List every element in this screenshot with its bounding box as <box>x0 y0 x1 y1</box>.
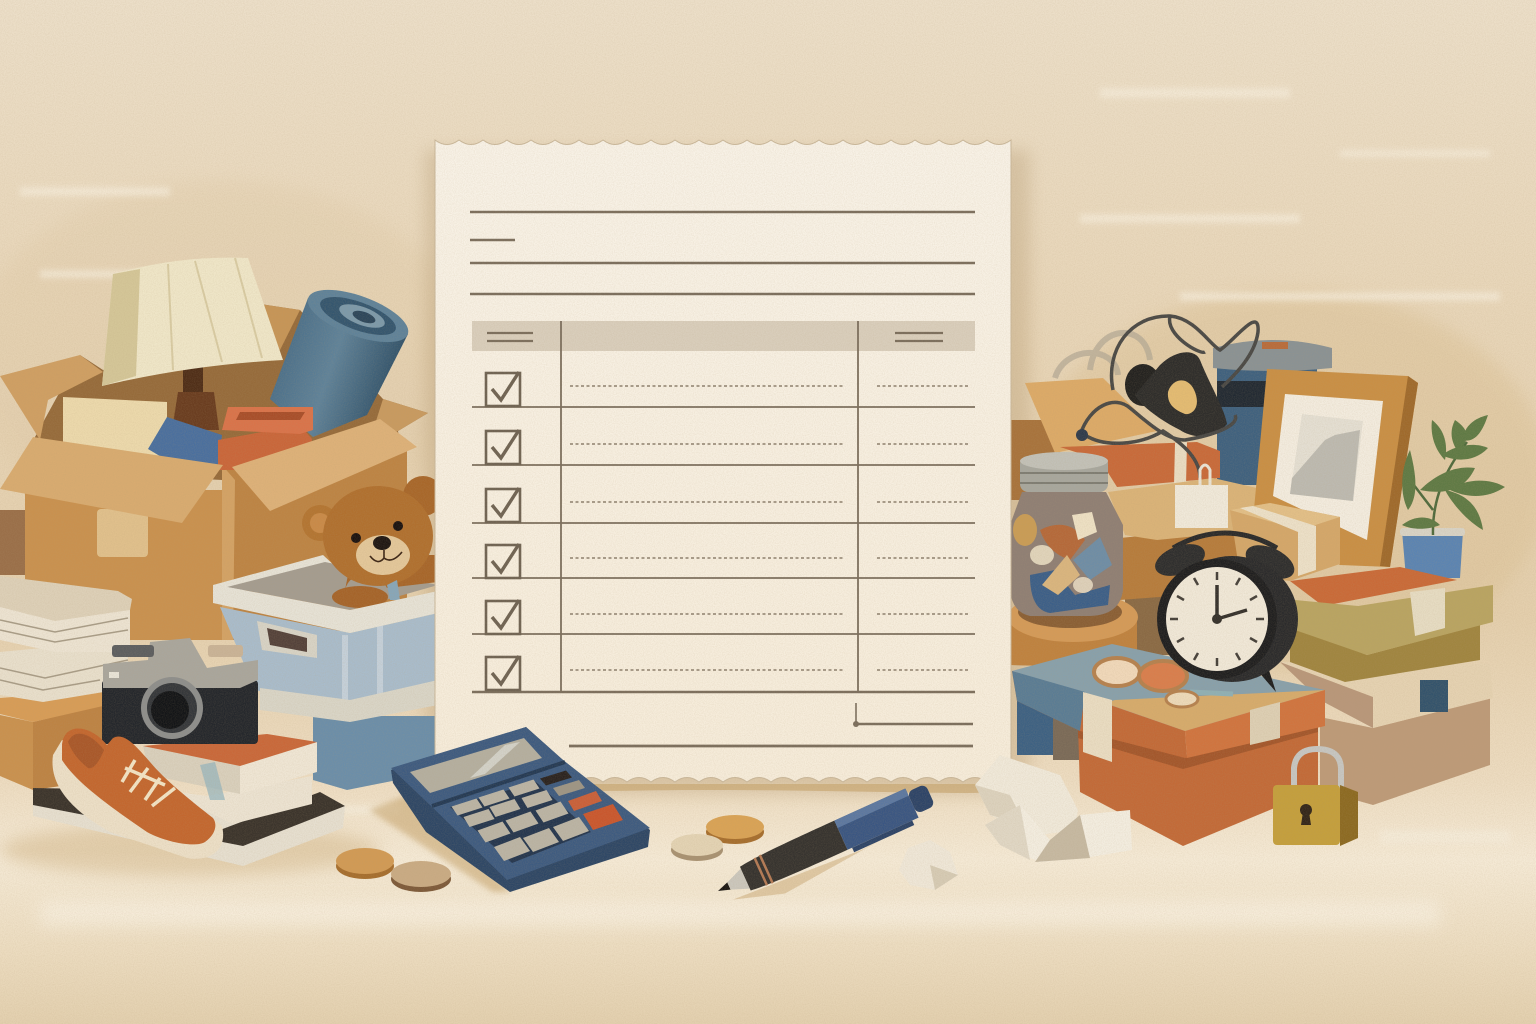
orange box <box>218 407 313 470</box>
bin front rim <box>213 585 438 633</box>
back box and flap <box>1010 378 1157 500</box>
cream and tan box <box>1280 662 1493 805</box>
bin interior <box>227 562 438 610</box>
receipt shadow <box>425 150 1030 795</box>
white book stack <box>0 576 132 702</box>
big orange box <box>1012 644 1325 846</box>
sneaker sole <box>52 740 223 859</box>
package with tape <box>1230 503 1340 581</box>
cylinder under jar <box>1008 592 1138 666</box>
small white bag <box>1175 465 1228 528</box>
bin band <box>260 680 438 722</box>
alarm clock <box>1151 533 1299 692</box>
calculator shadow <box>369 790 510 892</box>
glass jar <box>1010 452 1123 616</box>
box rear flaps and interior <box>0 304 428 480</box>
crumpled paper large <box>975 755 1132 862</box>
rolled mat <box>270 279 415 437</box>
orange package <box>1060 442 1220 487</box>
front flaps <box>0 419 417 523</box>
sneaker <box>52 728 223 859</box>
small stack of books and box <box>0 576 132 790</box>
storage bin with teddy bear <box>213 476 443 790</box>
back canister <box>1213 340 1332 485</box>
table grid <box>472 321 975 692</box>
calculator body <box>391 727 650 892</box>
box body <box>0 440 407 640</box>
pile shadow left <box>0 824 380 876</box>
coin <box>391 861 451 892</box>
table header <box>472 321 975 351</box>
black book <box>33 788 345 866</box>
plant <box>1400 415 1505 578</box>
pen <box>711 780 943 918</box>
tan boxes <box>1108 478 1257 655</box>
coin <box>706 815 764 844</box>
bin back rim <box>213 555 350 592</box>
cardboard box with contents <box>0 258 428 640</box>
coins <box>336 815 764 892</box>
orange books <box>143 734 317 824</box>
calculator keys <box>450 770 623 863</box>
dotted entry lines <box>570 386 968 670</box>
calculator <box>369 727 650 892</box>
padlock <box>1273 749 1358 846</box>
right pile <box>1008 316 1505 846</box>
checklist receipt <box>435 140 1011 782</box>
teddy bear <box>302 476 443 608</box>
lower bin <box>313 716 437 790</box>
receipt bottom shadow band <box>560 784 1012 793</box>
camera <box>102 638 258 744</box>
orange lid under frame <box>1290 567 1457 606</box>
blue item <box>148 417 222 470</box>
low box <box>0 690 103 790</box>
sneaker upper <box>62 728 215 844</box>
cream box <box>63 397 167 470</box>
lamp <box>102 258 283 430</box>
checkboxes <box>486 372 520 690</box>
signature lines <box>569 703 973 746</box>
receipt sheet <box>435 140 1011 782</box>
coin <box>671 834 723 861</box>
coin <box>336 848 394 879</box>
headphones and cables <box>1076 316 1258 478</box>
upper bin <box>220 607 438 710</box>
heading lines <box>470 212 975 294</box>
picture frame <box>1253 369 1418 567</box>
calculator screen <box>410 738 542 793</box>
glasses and key <box>1094 658 1233 707</box>
crumpled paper small <box>899 840 958 890</box>
olive box <box>1290 585 1493 682</box>
cable shadow <box>1055 333 1150 378</box>
